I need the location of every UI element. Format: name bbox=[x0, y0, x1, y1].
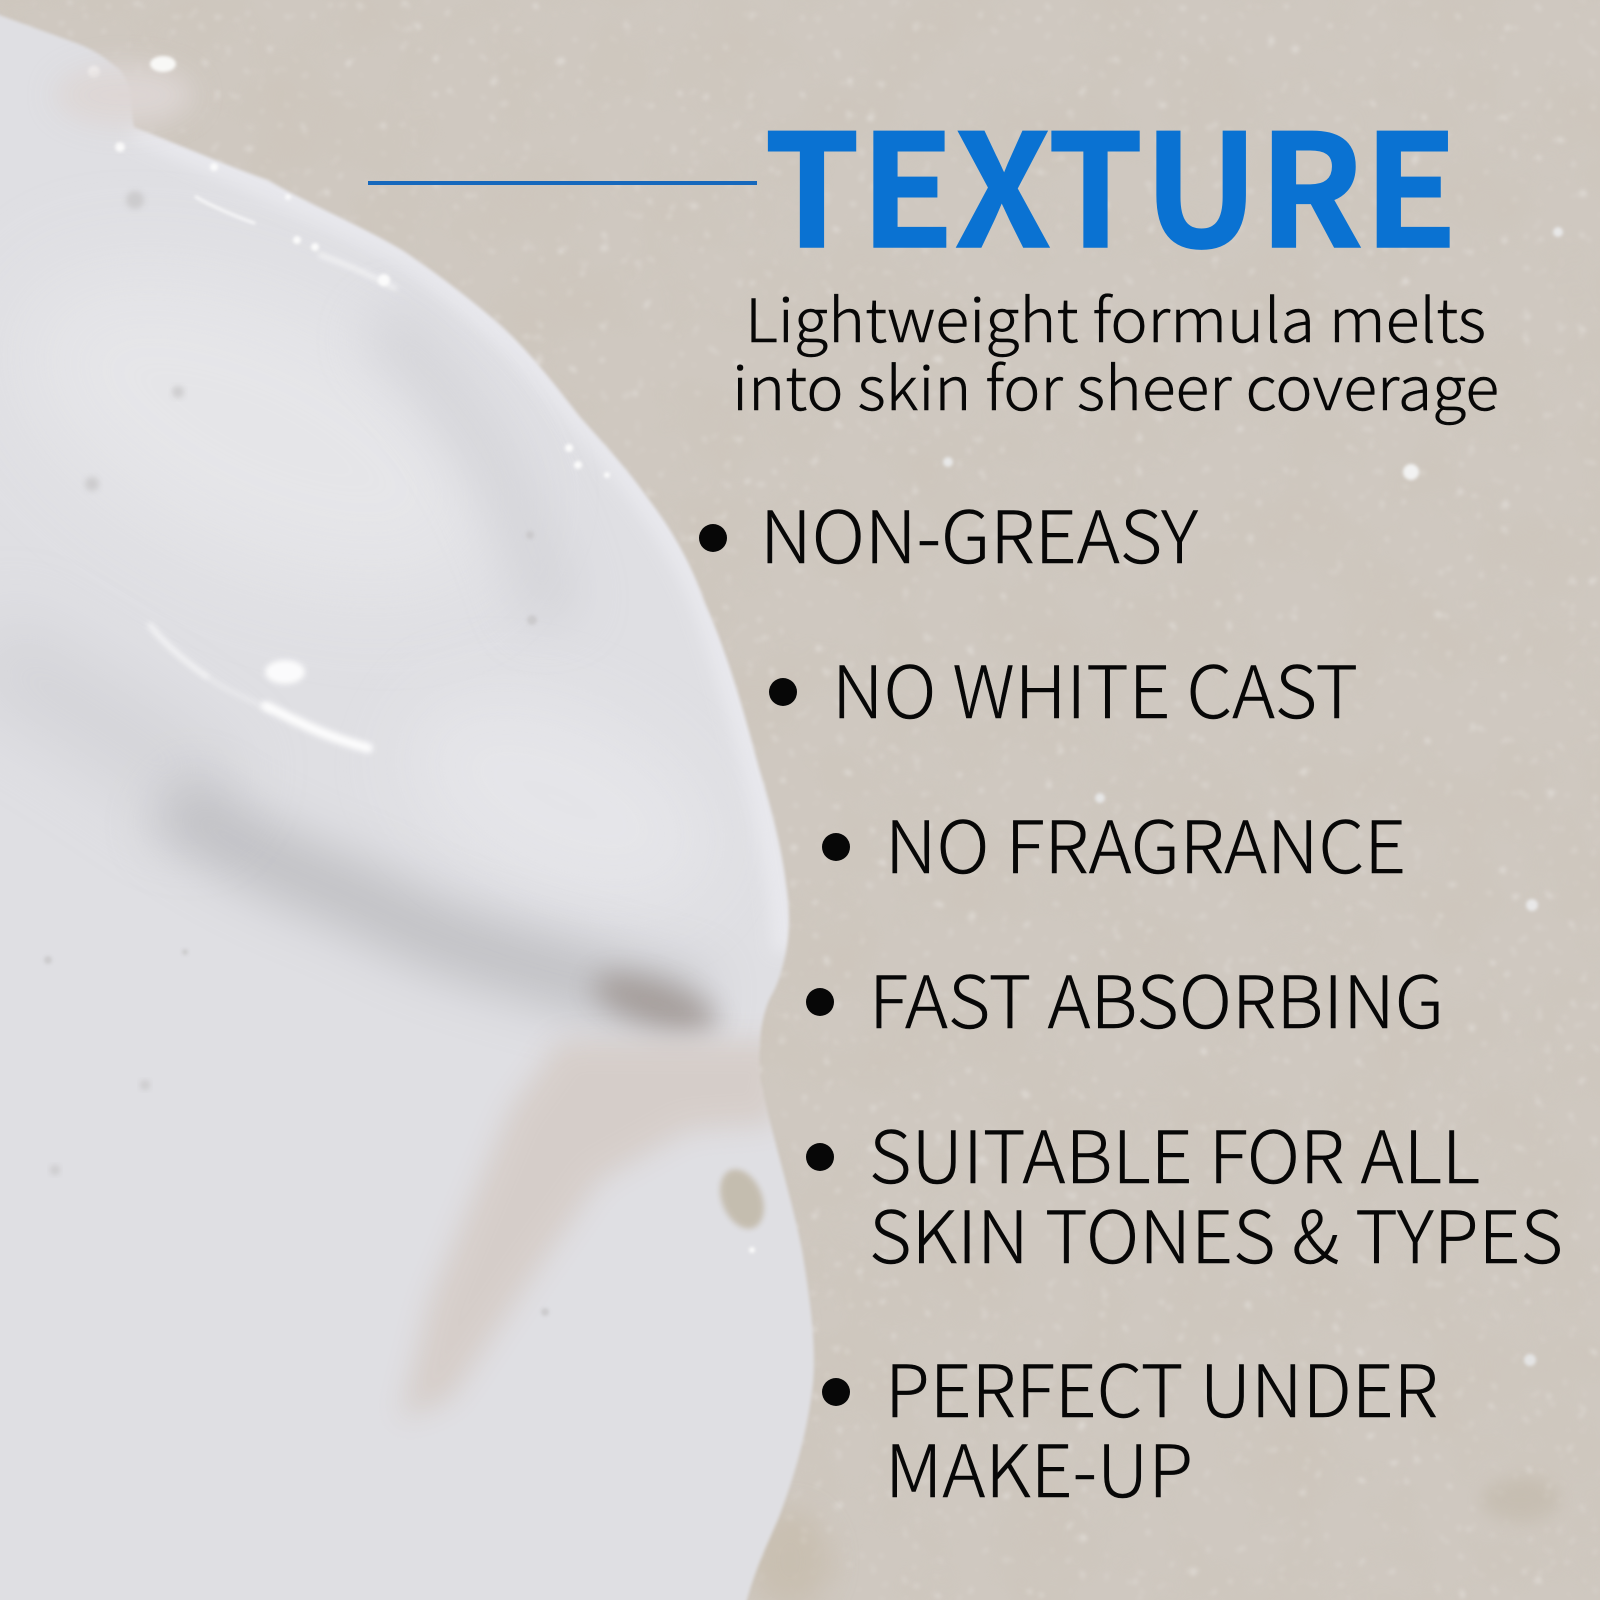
cream: darkest crease bbox=[586, 962, 724, 1044]
cream: rim glints bbox=[88, 66, 755, 1253]
cream: main shadow band bbox=[170, 800, 700, 1010]
cream: diagonal upper shading bbox=[393, 339, 548, 582]
bullet: suitable for all skin tones and types: SUITABLE FOR ALL bbox=[869, 1099, 1480, 1204]
subtitle bbox=[732, 273, 1499, 428]
bullet: perfect under make-up: PERFECT UNDER bbox=[885, 1333, 1438, 1438]
cream: warm lower fold bbox=[400, 1040, 790, 1420]
subtitle: into skin for sheer coverage bbox=[732, 341, 1499, 428]
bullet: no fragrance: NO FRAGRANCE bbox=[885, 789, 1406, 894]
bullet: no white cast: NO WHITE CAST bbox=[832, 634, 1358, 739]
cream tip highlight bbox=[150, 56, 176, 72]
cream: bubble dent bbox=[718, 1167, 766, 1232]
cream: edge glow bbox=[134, 127, 786, 952]
bullet: suitable for all skin tones and types: SKIN TONES & TYPES bbox=[869, 1179, 1563, 1284]
rule line bbox=[368, 181, 757, 185]
cream: small flecks bbox=[44, 191, 549, 1316]
title: TEXTURE bbox=[764, 66, 1458, 292]
bullet: perfect under make-up bbox=[822, 1333, 1438, 1518]
cream: bright upper body bbox=[0, 202, 551, 658]
bullet: non-greasy: NON-GREASY bbox=[760, 479, 1198, 584]
bullet: perfect under make-up: MAKE-UP bbox=[885, 1413, 1193, 1518]
cream: soft fold left of highlight bbox=[22, 668, 178, 774]
bullet: suitable for all skin tones and types bbox=[806, 1099, 1563, 1284]
cream top lobe bbox=[55, 65, 195, 125]
subtitle: Lightweight formula melts bbox=[745, 273, 1486, 360]
cream: specular highlights bbox=[150, 197, 395, 748]
bullet: fast absorbing: FAST ABSORBING bbox=[869, 944, 1444, 1049]
cream swatch bbox=[0, 14, 815, 1600]
